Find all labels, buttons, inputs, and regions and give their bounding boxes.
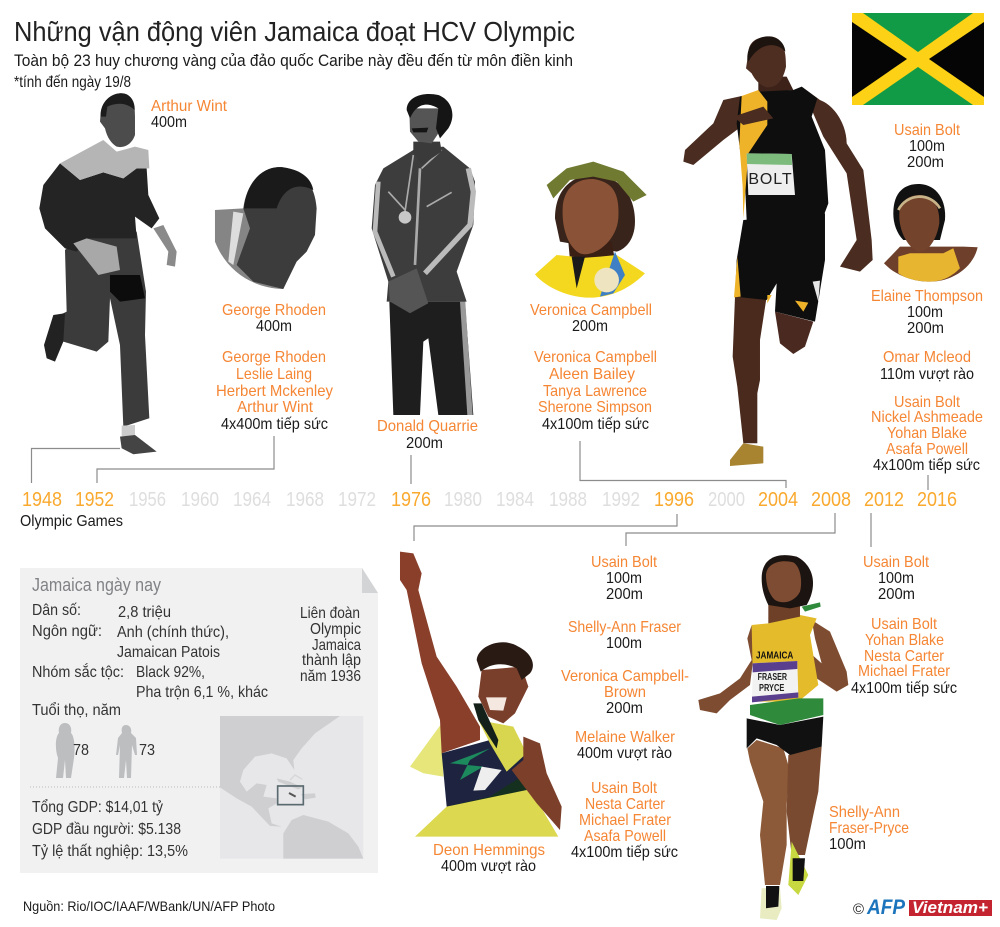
photo: Veronica Campbell	[535, 162, 647, 298]
logo: copyright AFP	[853, 896, 906, 919]
photo: Shelly-Ann Fraser-Pryce	[698, 555, 848, 920]
label: Usain Bolt 2016: 200m	[907, 154, 944, 171]
label: 4x100m relay 2016: Nickel Ashmeade	[871, 409, 983, 426]
label: Usain Bolt 2008: Usain Bolt	[591, 554, 658, 571]
label: Veronica Campbell 200m: 200m	[572, 318, 608, 335]
label: Usain Bolt 2008: 200m	[606, 586, 643, 603]
timeline years: 1972	[338, 489, 376, 511]
map: Caribbean	[220, 716, 363, 859]
facts: population: Dân số:	[32, 602, 81, 619]
label: Donald Quarrie 200m	[377, 418, 478, 452]
photo: Arthur Wint	[39, 93, 177, 454]
label: 4x100m relay 2008: Asafa Powell	[584, 828, 666, 845]
label: 4x100m relay 2016	[871, 394, 983, 474]
label: Elaine Thompson: 100m	[907, 304, 943, 321]
facts: language: Jamaican Patois	[117, 644, 220, 661]
timeline years: 1952	[75, 489, 114, 511]
olympic committee note: năm 1936	[300, 668, 361, 685]
label: 4x400m relay team: 4x400m tiếp sức	[221, 416, 328, 433]
bib name text: FRASER	[758, 672, 787, 683]
jersey text: Jamaica: JAMAICA	[756, 650, 793, 661]
label: Usain Bolt 2016: 100m	[909, 138, 945, 155]
label: 4x100m relay 2012: Michael Frater	[858, 663, 951, 680]
label: George Rhoden 400m: 400m	[256, 318, 292, 335]
label: 4x100m relay 2008: Usain Bolt	[591, 780, 658, 797]
label: Elaine Thompson	[871, 288, 983, 337]
label: 4x100m relay 2016: Usain Bolt	[894, 394, 961, 411]
value: female life expectancy: 78	[73, 742, 89, 759]
timeline years: 1960	[181, 489, 219, 511]
label: 4x100m relay 2012: 4x100m tiếp sức	[851, 680, 957, 697]
facts: language	[32, 623, 229, 661]
label: Shelly-Ann Fraser 2008: 100m	[606, 635, 642, 652]
label: Arthur Wint 400m: 400m	[151, 114, 187, 131]
label: Omar Mcleod: Omar Mcleod	[883, 349, 971, 366]
timeline years: 1984	[496, 489, 534, 511]
bib name text: PRYCE	[759, 683, 785, 694]
logo: copyright AFP: AFP	[866, 896, 906, 919]
olympic committee note: Liên đoàn	[300, 605, 360, 622]
label: Veronica Campbell-Brown: 200m	[606, 700, 643, 717]
timeline years: 2008	[811, 489, 851, 511]
label: Shelly-Ann Fraser-Pryce 100m: 100m	[829, 836, 866, 853]
photo: George Rhoden	[215, 167, 317, 289]
facts: economy: GDP đầu người: $5.138	[32, 821, 181, 838]
timeline years: 1976	[391, 489, 431, 511]
facts: economy: Tổng GDP: $14,01 tỷ	[32, 798, 163, 816]
label: 4x100m relay 2012: Yohan Blake	[865, 632, 944, 649]
label: 4x100m relay 2004	[534, 349, 657, 433]
label: 4x100m relay 2004: Aleen Bailey	[549, 366, 635, 383]
label: Usain Bolt 2008: 100m	[606, 570, 642, 587]
label: 4x100m relay 2004: Tanya Lawrence	[543, 383, 647, 400]
facts: population	[32, 602, 171, 621]
bib name text	[758, 672, 787, 694]
label: George Rhoden 400m: George Rhoden	[222, 302, 326, 319]
logo: Vietnam+: Vietnam+	[912, 898, 988, 917]
label: 4x100m relay 2016: Yohan Blake	[887, 425, 967, 442]
label: Melaine Walker	[575, 729, 676, 762]
photo: Usain Bolt	[683, 36, 873, 466]
flag of Jamaica	[852, 13, 984, 105]
timeline caption: Olympic Games	[20, 513, 123, 530]
label: Veronica Campbell 200m	[530, 302, 652, 335]
facts: language: Anh (chính thức),	[117, 624, 229, 641]
label: Veronica Campbell-Brown: Brown	[604, 684, 646, 701]
label: 4x100m relay 2016: 4x100m tiếp sức	[873, 457, 980, 474]
label: Veronica Campbell-Brown: Veronica Campbell-	[561, 668, 689, 685]
label: Deon Hemmings	[433, 842, 545, 875]
label: 4x100m relay 2004: Sherone Simpson	[538, 399, 652, 416]
label: Usain Bolt 2012: 100m	[878, 570, 914, 587]
value: male life expectancy: 73	[139, 742, 155, 759]
title: Những vận động viên Jamaica đoạt HCV Olympic	[14, 16, 575, 47]
label: 4x400m relay team: Herbert Mckenley	[216, 383, 333, 400]
label: Shelly-Ann Fraser 2008	[568, 619, 682, 652]
label: 4x100m relay 2008: Nesta Carter	[585, 796, 666, 813]
label: Deon Hemmings: Deon Hemmings	[433, 842, 545, 859]
label: 4x100m relay 2008: Michael Frater	[579, 812, 672, 829]
label: Usain Bolt 2012: Usain Bolt	[863, 554, 930, 571]
label: 4x400m relay team: Arthur Wint	[237, 399, 314, 416]
facts: ethnic groups	[32, 662, 268, 701]
label: 4x100m relay 2012	[851, 616, 957, 697]
label: Usain Bolt 2016	[894, 122, 961, 171]
label: Arthur Wint 400m: Arthur Wint	[151, 98, 228, 115]
photo: Elaine Thompson	[884, 184, 978, 282]
timeline years: 2000	[708, 489, 745, 511]
facts: language: Ngôn ngữ:	[32, 623, 102, 640]
label: Shelly-Ann Fraser-Pryce 100m: Fraser-Pryce	[829, 820, 909, 837]
label: 4x400m relay team: George Rhoden	[222, 349, 326, 366]
label: Omar Mcleod	[880, 349, 974, 383]
bib text: BOLT: BOLT	[748, 171, 792, 188]
label: George Rhoden 400m	[222, 302, 326, 335]
logo: copyright AFP: ©	[853, 901, 864, 918]
timeline years: 2004	[758, 489, 798, 511]
timeline years: 1956	[129, 489, 166, 511]
label: Melaine Walker: Melaine Walker	[575, 729, 676, 746]
timeline connector lines	[32, 436, 928, 547]
label: Omar Mcleod: 110m vượt rào	[880, 366, 974, 383]
facts: economy: Tỷ lệ thất nghiệp: 13,5%	[32, 843, 188, 860]
label: Shelly-Ann Fraser 2008: Shelly-Ann Fraser	[568, 619, 682, 636]
label: 4x100m relay 2012: Usain Bolt	[871, 616, 938, 633]
panel heading: Jamaica ngày nay	[32, 575, 161, 595]
olympic committee note: Jamaica	[312, 637, 361, 654]
label: Donald Quarrie 200m: Donald Quarrie	[377, 418, 478, 435]
label: 4x100m relay 2016: Asafa Powell	[886, 441, 968, 458]
facts: ethnic groups: Pha trộn 6,1 %, khác	[136, 684, 268, 701]
photo: Deon Hemmings	[400, 552, 562, 837]
label: Arthur Wint 400m	[151, 98, 228, 131]
timeline years: 1968	[286, 489, 324, 511]
label: 4x100m relay 2004: 4x100m tiếp sức	[542, 416, 649, 433]
icon: female silhouette	[56, 723, 75, 778]
icon: male silhouette	[116, 725, 137, 778]
label: Melaine Walker: 400m vượt rào	[577, 745, 672, 762]
label: Usain Bolt 2008	[591, 554, 658, 603]
subtitle: Toàn bộ 23 huy chương vàng của đảo quốc Caribe này đều đến từ môn điền kinh	[14, 51, 573, 70]
timeline years: 1992	[602, 489, 640, 511]
label: 4x100m relay 2012: Nesta Carter	[864, 648, 945, 665]
timeline years: 1996	[654, 489, 694, 511]
timeline years: 1980	[444, 489, 482, 511]
photo: Donald Quarrie	[372, 94, 475, 415]
panel: Jamaica today	[20, 568, 378, 873]
olympic committee note: Olympic	[310, 621, 361, 638]
olympic committee note: thành lập	[302, 652, 361, 669]
label: 4x100m relay 2004: Veronica Campbell	[534, 349, 657, 366]
label: Veronica Campbell 200m: Veronica Campbell	[530, 302, 652, 319]
label: Usain Bolt 2012: 200m	[878, 586, 915, 603]
facts: economy	[32, 798, 188, 860]
olympic committee note	[300, 605, 361, 685]
timeline years: 2016	[917, 489, 957, 511]
timeline years: 1948	[22, 489, 62, 511]
label: Shelly-Ann Fraser-Pryce 100m: Shelly-Ann	[829, 804, 900, 821]
label: 4x100m relay 2008	[571, 780, 678, 861]
facts: ethnic groups: Black 92%,	[136, 664, 205, 681]
label: Donald Quarrie 200m: 200m	[406, 435, 443, 452]
label: 4x400m relay team: Leslie Laing	[236, 366, 312, 383]
label: Elaine Thompson: Elaine Thompson	[871, 288, 983, 305]
timeline years	[22, 489, 957, 511]
timeline years: 2012	[864, 489, 904, 511]
label: Veronica Campbell-Brown	[561, 668, 689, 717]
facts: ethnic groups: Nhóm sắc tộc:	[32, 662, 124, 681]
label: 4x400m relay team	[216, 349, 333, 433]
label: Usain Bolt 2016: Usain Bolt	[894, 122, 961, 139]
label: Shelly-Ann Fraser-Pryce 100m	[829, 804, 909, 853]
label: 4x100m relay 2008: 4x100m tiếp sức	[571, 844, 678, 861]
timeline years: 1964	[233, 489, 271, 511]
source: Nguồn: Rio/IOC/IAAF/WBank/UN/AFP Photo	[23, 898, 275, 914]
timeline years: 1988	[549, 489, 587, 511]
date note: *tính đến ngày 19/8	[14, 74, 131, 91]
label: Elaine Thompson: 200m	[907, 320, 944, 337]
facts: population: 2,8 triệu	[118, 604, 171, 621]
facts: life expectancy heading: Tuổi thọ, năm	[32, 701, 121, 719]
label: Usain Bolt 2012	[863, 554, 930, 603]
label: Deon Hemmings: 400m vượt rào	[441, 858, 536, 875]
